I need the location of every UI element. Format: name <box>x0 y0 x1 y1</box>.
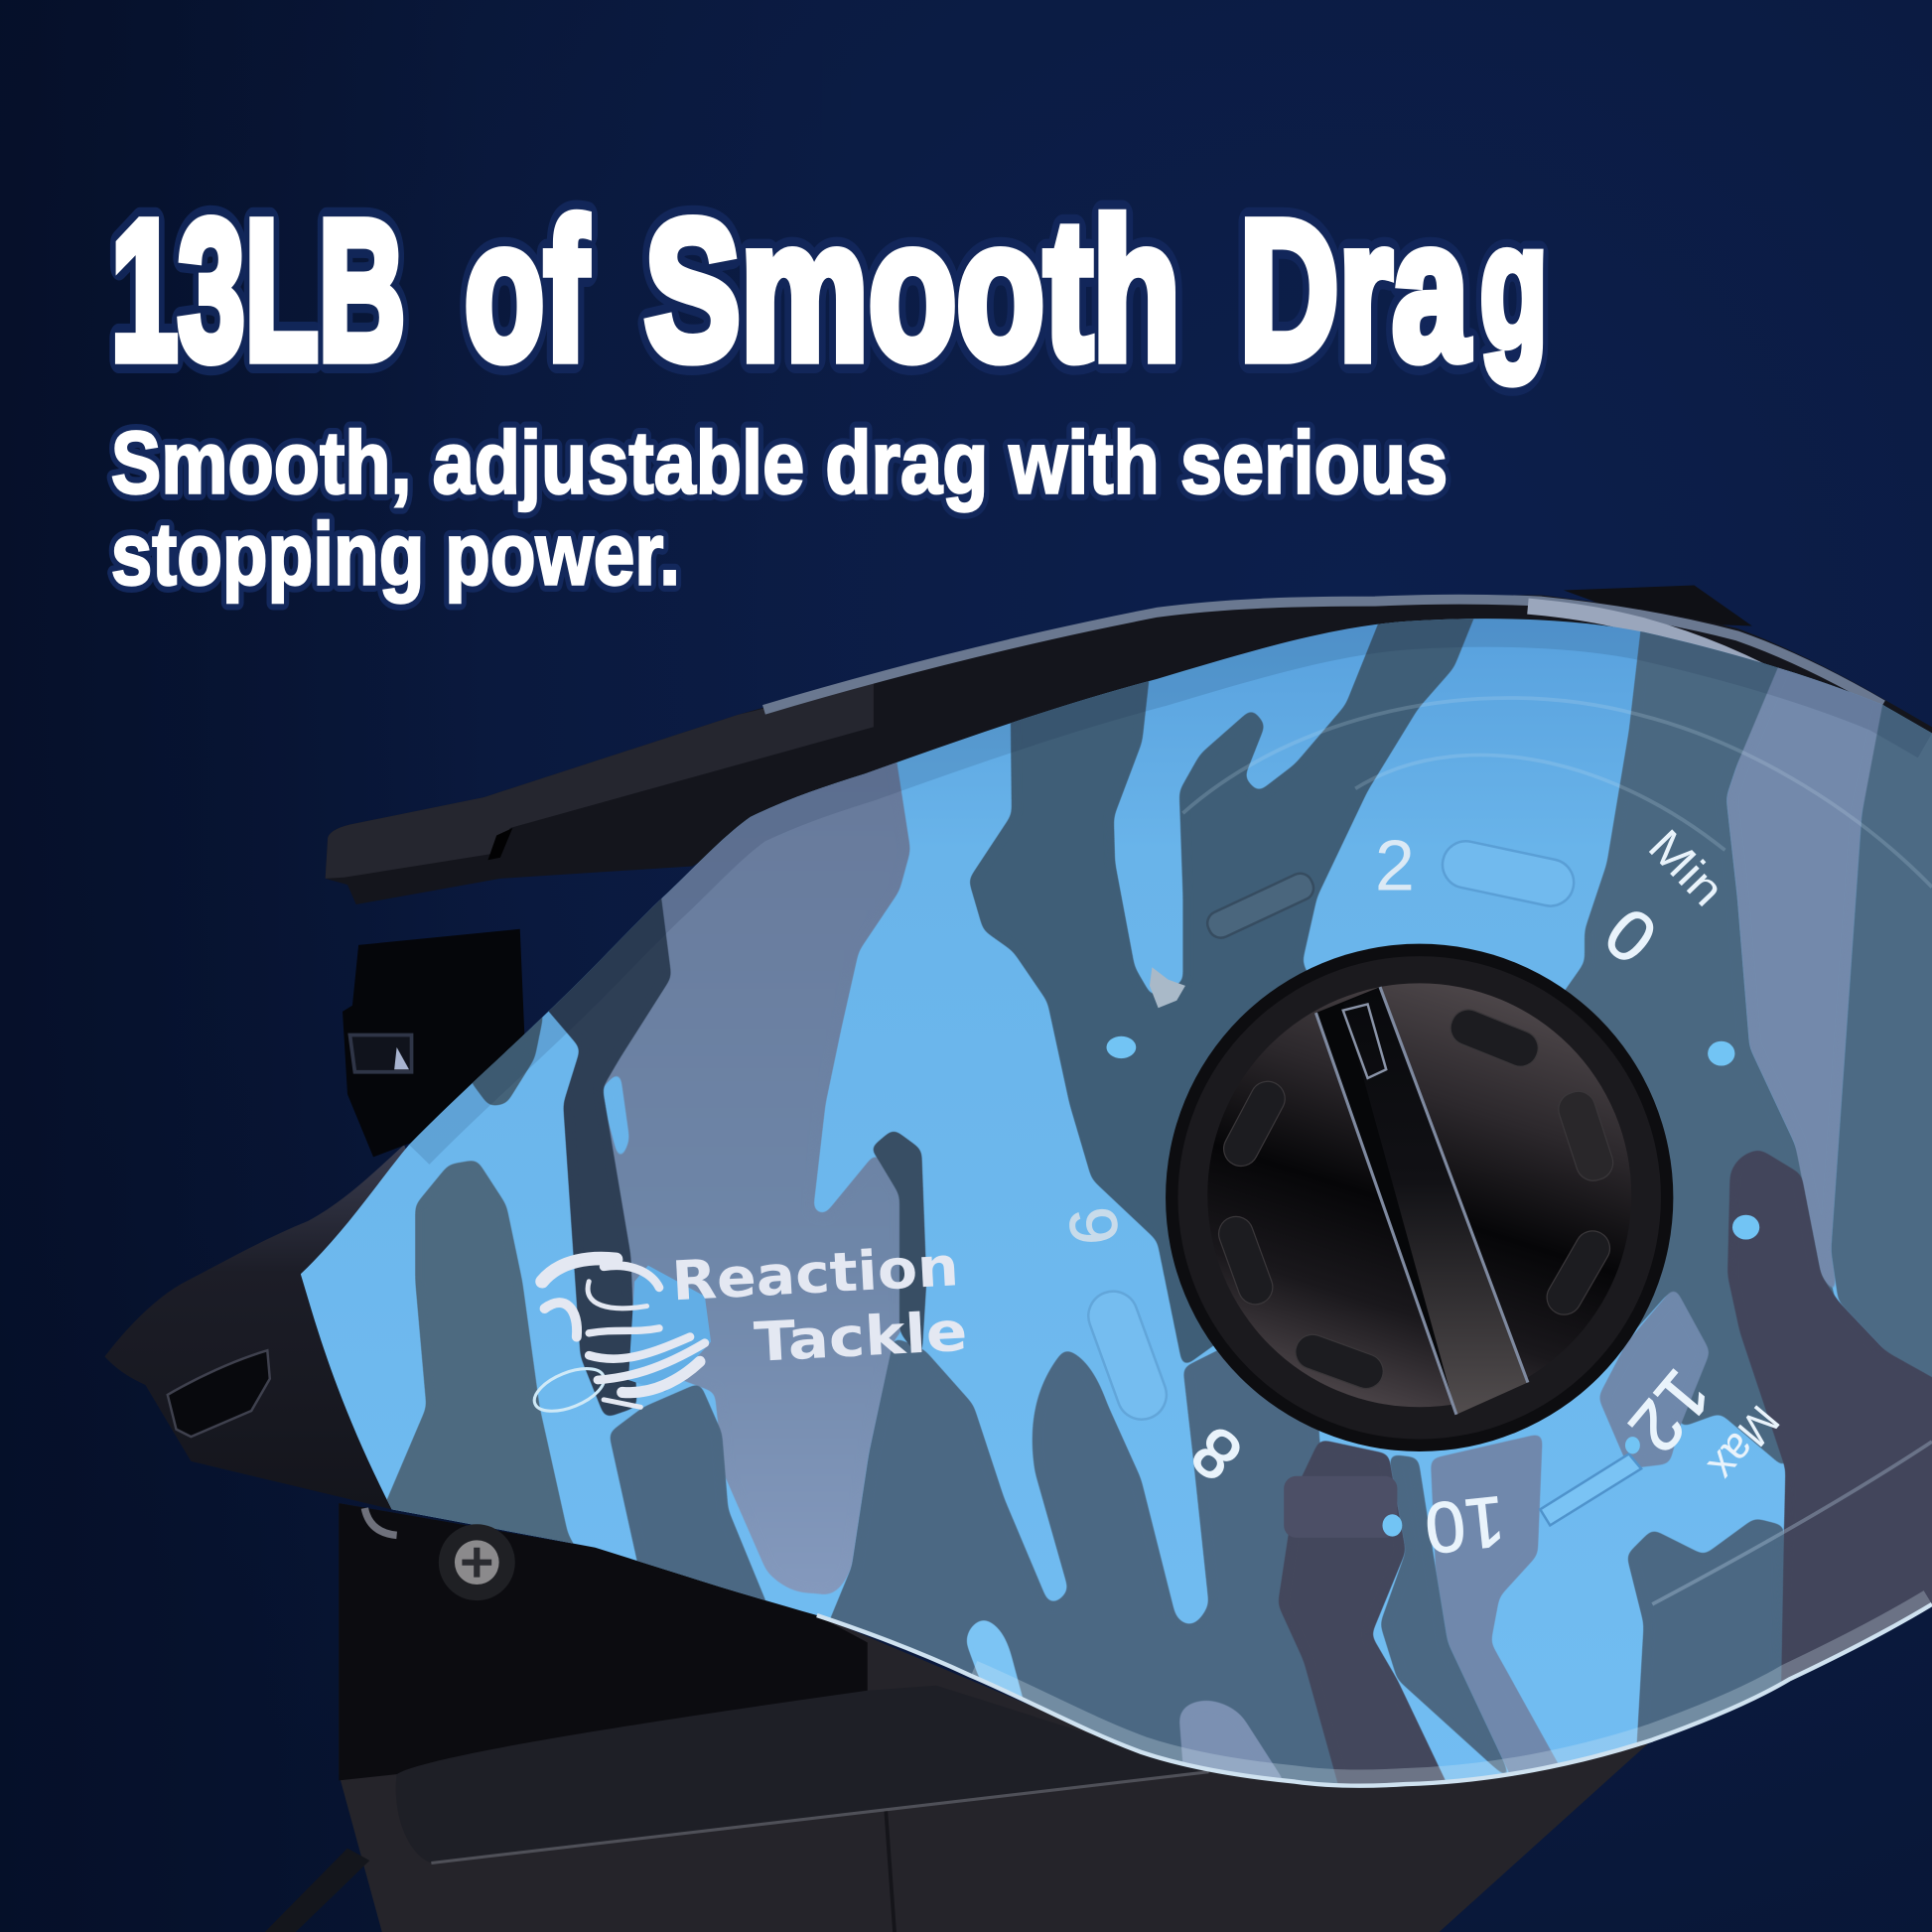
logo backdrop <box>628 1266 711 1392</box>
dial markings <box>1055 819 1788 1568</box>
slot recess 6 <box>1087 1291 1168 1421</box>
title words <box>111 180 1548 401</box>
title words: 13LB <box>111 180 405 401</box>
grey patch by 10 <box>1431 1436 1558 1772</box>
upper rim shading <box>409 619 1932 1145</box>
dark vertical stripe <box>548 898 671 1416</box>
knob ridge <box>1315 987 1528 1415</box>
slot recess 12 <box>1540 1453 1641 1525</box>
title halo: Smooth <box>644 180 1180 401</box>
camo rim highlight <box>817 1604 1932 1786</box>
teal far right <box>1831 678 1932 1417</box>
mark Max: Max <box>1699 1396 1788 1489</box>
mark 6: 6 <box>1055 1204 1133 1248</box>
dark patch right <box>1727 1150 1932 1725</box>
camouflage body <box>246 579 1932 1811</box>
brand logo: Tackle <box>753 1300 969 1374</box>
title halo: 13LB <box>111 180 405 401</box>
teal upper centre <box>968 592 1484 1368</box>
reel lower frame <box>265 1503 1652 1932</box>
top cover <box>326 586 1932 904</box>
teal lower centre <box>830 1340 1338 1783</box>
dial dots <box>1106 1036 1759 1537</box>
slot recess 2 <box>1442 840 1575 907</box>
subtitle: Smooth, adjustable drag with serious <box>111 412 1448 511</box>
subtitle <box>111 412 1448 603</box>
title words: of <box>465 180 588 401</box>
slot recess upper <box>1206 872 1314 939</box>
wordmark: Reaction <box>670 1234 960 1312</box>
subtitle: stopping power. <box>111 503 680 603</box>
knob grip pads <box>1214 1005 1617 1393</box>
reel nose <box>104 1145 419 1509</box>
title words: Smooth <box>644 180 1180 401</box>
mark 10: 10 <box>1422 1480 1509 1568</box>
dark crescent <box>873 1132 927 1353</box>
title halo: Dra <box>1240 180 1470 401</box>
side clip <box>343 929 525 1157</box>
fish mark <box>528 1259 705 1420</box>
title words: Dra <box>1240 180 1470 401</box>
grey bottom blob <box>1179 1700 1282 1778</box>
grey right stripe <box>1726 647 1891 1302</box>
subtitle: Smooth, adjustable drag with serious <box>111 412 1448 511</box>
grey patch by 12 <box>1598 1287 1711 1468</box>
subtitle: stopping power. <box>111 503 680 603</box>
dark lower stripe <box>1279 1441 1446 1783</box>
light sliver <box>604 1076 629 1155</box>
title <box>111 180 1548 401</box>
mark Min: Min <box>1639 819 1734 915</box>
title halo: g <box>1480 189 1548 383</box>
title halo: of <box>465 180 588 401</box>
brand logo <box>528 1234 969 1420</box>
drag knob <box>1166 944 1673 1451</box>
mark 2: 2 <box>1375 826 1415 905</box>
teal lower stripe <box>1381 1455 1507 1773</box>
mark 12: 12 <box>1613 1355 1725 1466</box>
small teal top <box>473 1017 543 1106</box>
grey main panel <box>592 740 910 1594</box>
faint dial arcs <box>1182 698 1932 888</box>
teal lower-left band <box>610 1385 766 1600</box>
mark 8: 8 <box>1177 1412 1255 1496</box>
title words: g <box>1480 189 1548 383</box>
lower rim shading <box>971 1604 1932 1786</box>
mark 0: 0 <box>1589 894 1671 980</box>
light drip small <box>967 1620 1023 1698</box>
base blue <box>246 579 1932 1811</box>
title halo <box>111 180 1548 401</box>
slot recess 10 <box>1284 1476 1397 1538</box>
teal right stripe <box>1565 631 1835 1463</box>
reel illustration <box>104 579 1932 1932</box>
frame screw <box>439 1524 515 1600</box>
teal left stripe <box>387 1161 574 1543</box>
teal lower-right blob <box>1628 1519 1784 1742</box>
scratch mark <box>1150 967 1185 1008</box>
